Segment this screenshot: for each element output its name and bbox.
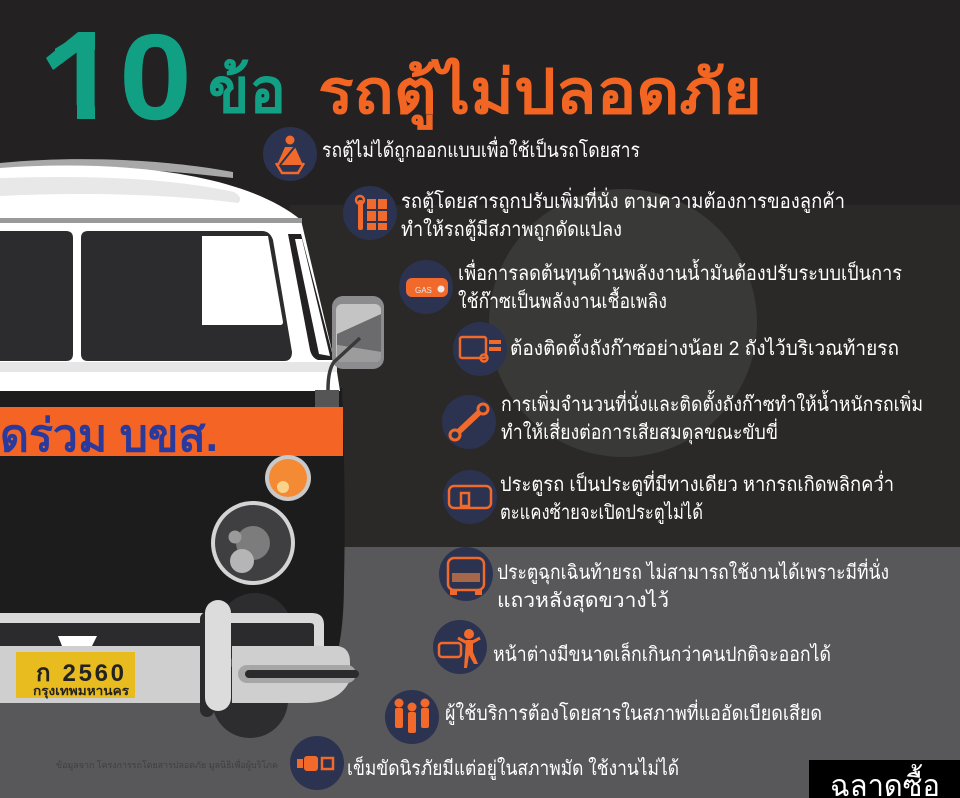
license plate: กรุงเทพมหานคร: [33, 684, 130, 699]
illustration: bus: [0, 159, 384, 738]
item 8: small window: [433, 620, 831, 674]
text: รถตู้ไม่ได้ถูกออกแบบเพื่อใช้เป็นรถโดยสาร: [322, 136, 640, 163]
icon: buckle: [290, 736, 344, 790]
item 2: modified seats: ทำให้รถตู้มีสภาพถูกดัดแปลง: [401, 218, 622, 242]
title: รถตู้ไม่ปลอดภัย: [318, 57, 762, 130]
text: เพื่อการลดต้นทุนด้านพลังงานน้ำมันต้องปรับระบบเป็นการ: [458, 259, 902, 286]
text: ประตูรถ เป็นประตูที่มีทางเดียว หากรถเกิดพลิกคว่ำ: [500, 470, 894, 497]
icon: gas tank: [399, 260, 453, 314]
icon: wrench and seats: [343, 186, 397, 240]
item 7: emergency door: [439, 547, 889, 613]
text: รถตู้โดยสารถูกปรับเพิ่มที่นั่ง ตามความต้องการของลูกค้า: [401, 187, 845, 214]
bumper: [0, 600, 359, 717]
amber lamp: [265, 455, 311, 501]
wheels: [218, 593, 292, 667]
icon: van door: [443, 470, 497, 524]
text: เข็มขัดนิรภัยมีแต่อยู่ในสภาพมัด ใช้งานไม่ได้: [347, 755, 679, 781]
item 6: door: ตะแคงซ้ายจะเปิดประตูไม่ได้: [500, 501, 703, 525]
icon: gas tank: GAS: [415, 286, 432, 295]
text: ประตูฉุกเฉินท้ายรถ ไม่สามารถใช้งานได้เพราะมีที่นั่ง: [497, 558, 889, 585]
item 5: weight: ทำให้เสี่ยงต่อการเสียสมดุลขณะขับขี่: [501, 418, 778, 445]
title: ข้อ: [208, 57, 286, 126]
item 5: weight: [442, 390, 923, 449]
orange destination band: [0, 407, 343, 456]
source note: ข้อมูลจาก โครงการรถโดยสารปลอดภัย มูลนิธิเพื่อผู้บริโภค: [56, 758, 278, 771]
license plate: ก 2560: [36, 660, 124, 687]
item 7: emergency door: แถวหลังสุดขวางไว้: [497, 589, 669, 613]
bus lower body: [0, 388, 345, 650]
license plate: [16, 652, 135, 699]
text: ต้องติดตั้งถังก๊าซอย่างน้อย 2 ถังไว้บริเวณท้ายรถ: [510, 334, 899, 360]
item 4: two tanks: [453, 322, 899, 376]
band text: ดร่วม บขส.: [0, 410, 218, 461]
title: 10: [46, 9, 192, 145]
logo: [809, 760, 960, 798]
icon: van rear with tanks: [453, 322, 507, 376]
item 10: seat belts tied: [290, 736, 679, 790]
item 3: gas: [399, 259, 902, 314]
item 1: seat belt: [263, 127, 640, 181]
icon: seated person with belt: [263, 127, 317, 181]
mirror: [315, 296, 384, 407]
text: ผู้ใช้บริการต้องโดยสารในสภาพที่แออัดเบียดเสียด: [445, 699, 822, 726]
item 6: door: [443, 470, 894, 525]
icon: suspension spring: [442, 395, 496, 449]
icon: three people: [385, 690, 439, 744]
headlight: [211, 501, 295, 585]
icon: van rear: [439, 547, 493, 601]
icon: person and window: [433, 620, 487, 674]
item 2: modified seats: [343, 186, 845, 242]
bus upper body: [0, 166, 340, 391]
item 9: crowded: [385, 690, 822, 744]
item 3: gas: ใช้ก๊าซเป็นพลังงานเชื้อเพลิง: [458, 287, 667, 313]
windows: [0, 231, 334, 361]
title: [40, 9, 762, 145]
text: หน้าต่างมีขนาดเล็กเกินกว่าคนปกติจะออกได้: [493, 641, 831, 666]
bus roof rim: [0, 159, 233, 178]
